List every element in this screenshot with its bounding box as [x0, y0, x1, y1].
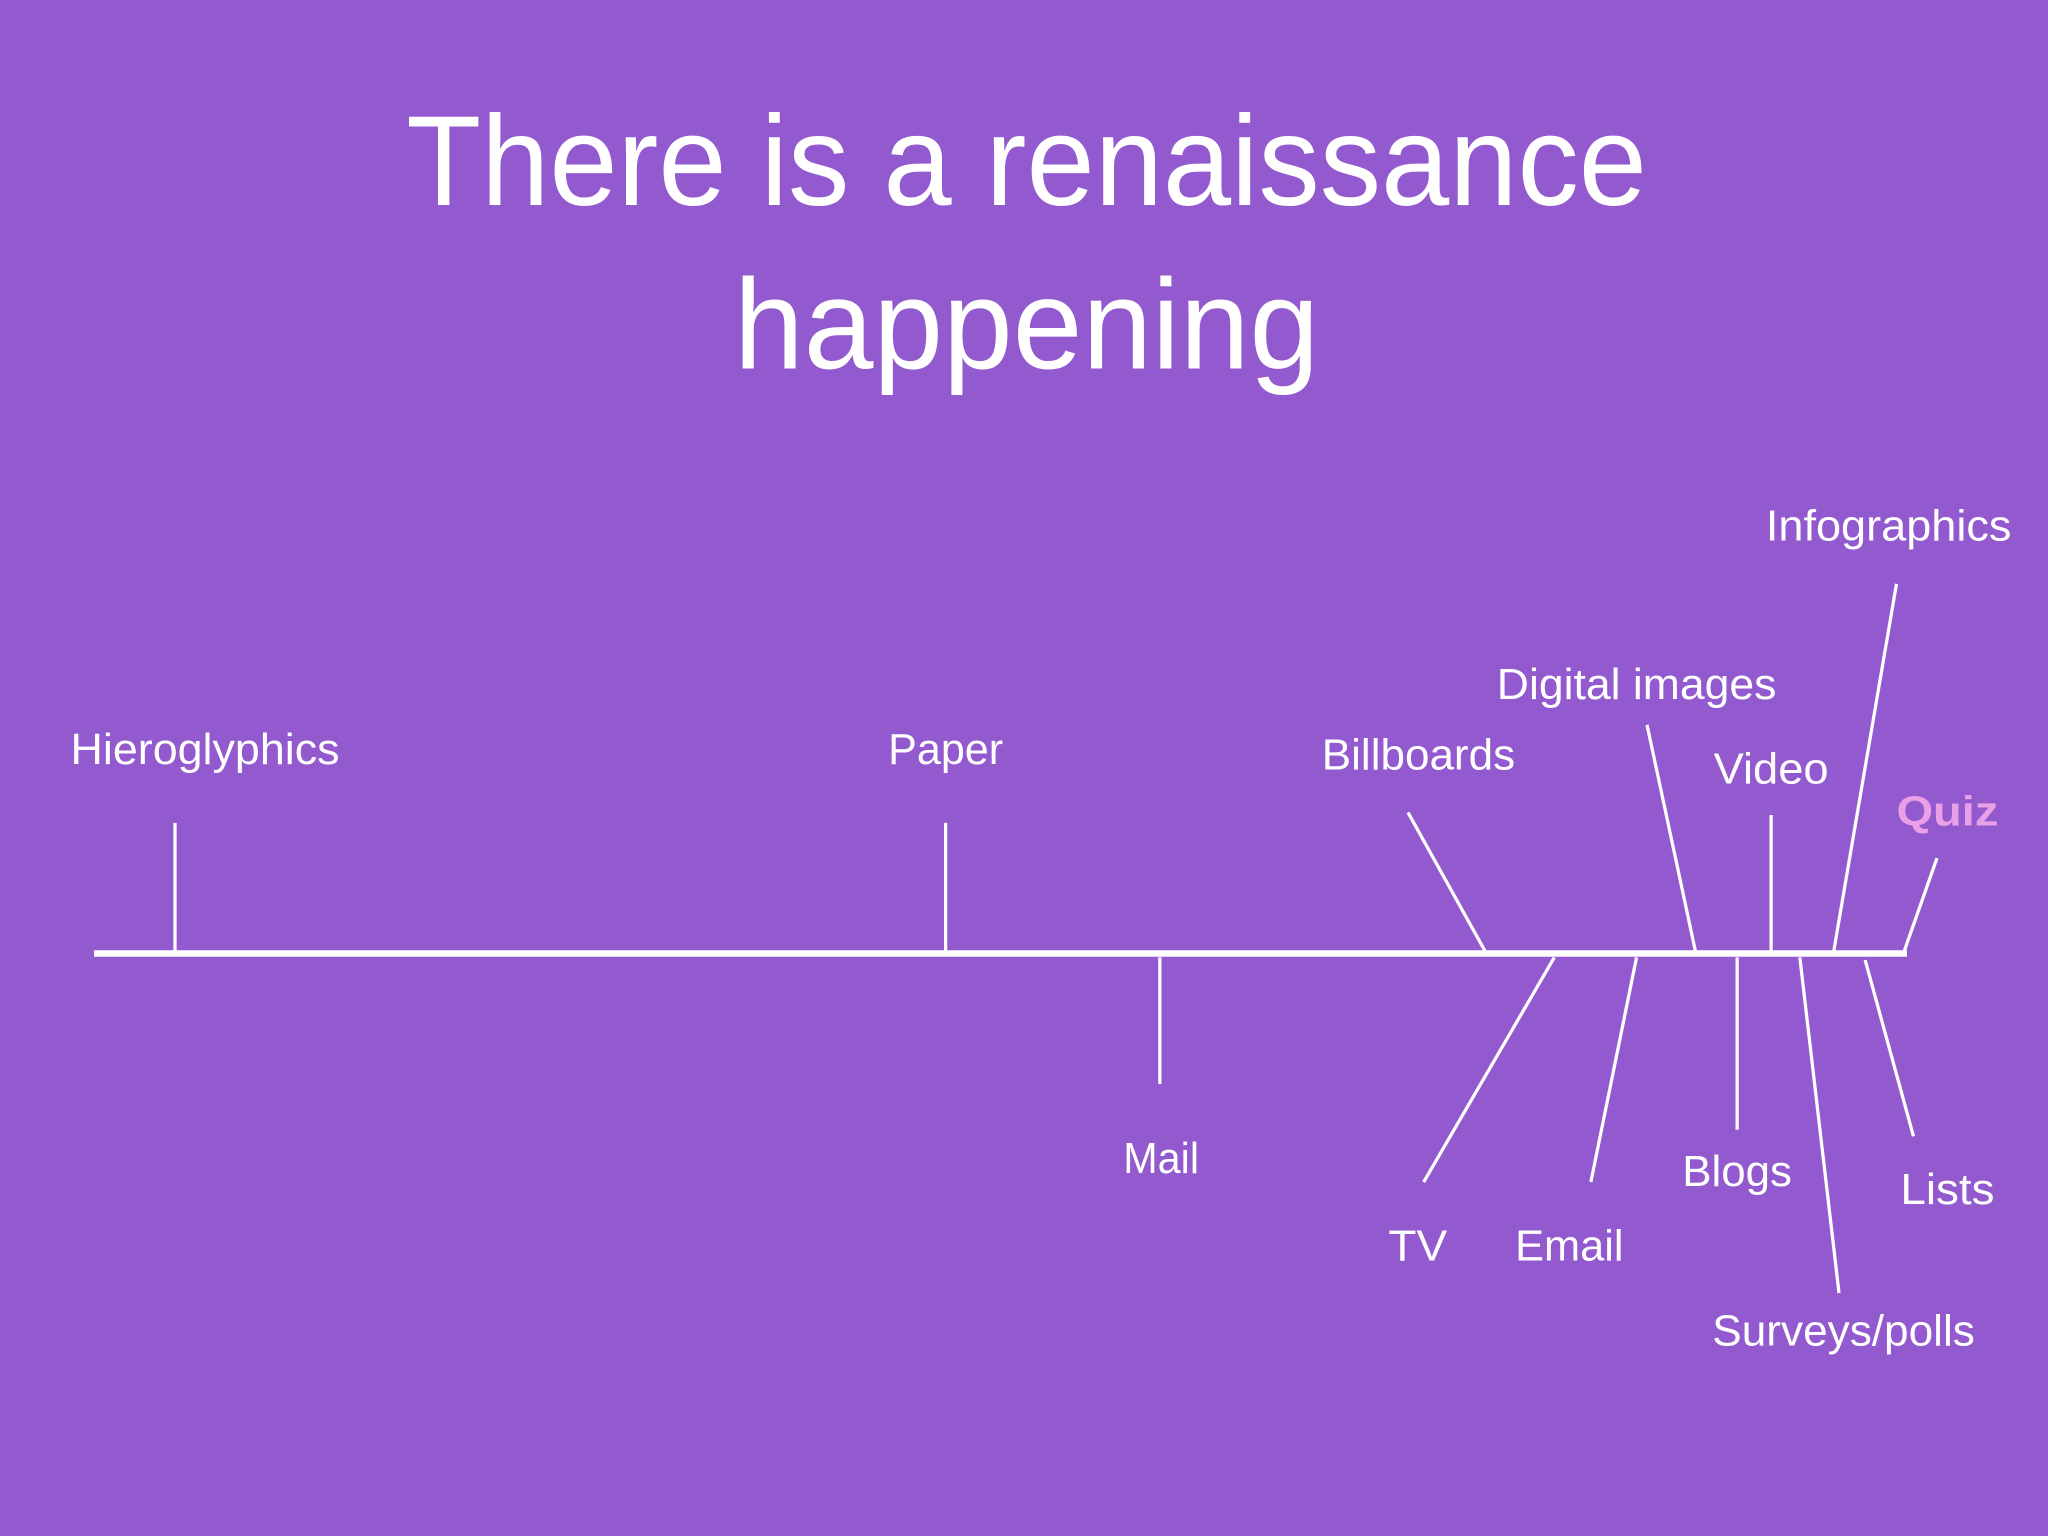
labels: Video: [1714, 746, 1829, 794]
labels: Surveys/polls: [1712, 1307, 1975, 1355]
labels: Mail: [1123, 1135, 1199, 1183]
labels: [71, 503, 2011, 1355]
timeline axis: [94, 951, 1907, 956]
title: happening: [734, 253, 1319, 396]
highlighted label: Quiz: Quiz: [1896, 787, 1998, 834]
labels: Blogs: [1682, 1148, 1792, 1196]
title: There is a renaissance: [406, 90, 1647, 233]
labels: Hieroglyphics: [71, 726, 340, 774]
labels: Infographics: [1766, 503, 2011, 551]
labels: Digital images: [1497, 661, 1776, 709]
labels: Paper: [888, 726, 1003, 774]
labels: Lists: [1900, 1166, 1994, 1214]
labels: TV: [1388, 1222, 1447, 1270]
tick lines: [175, 584, 1937, 1293]
labels: Email: [1515, 1222, 1624, 1270]
title: [406, 90, 1647, 396]
labels: Billboards: [1322, 731, 1515, 779]
